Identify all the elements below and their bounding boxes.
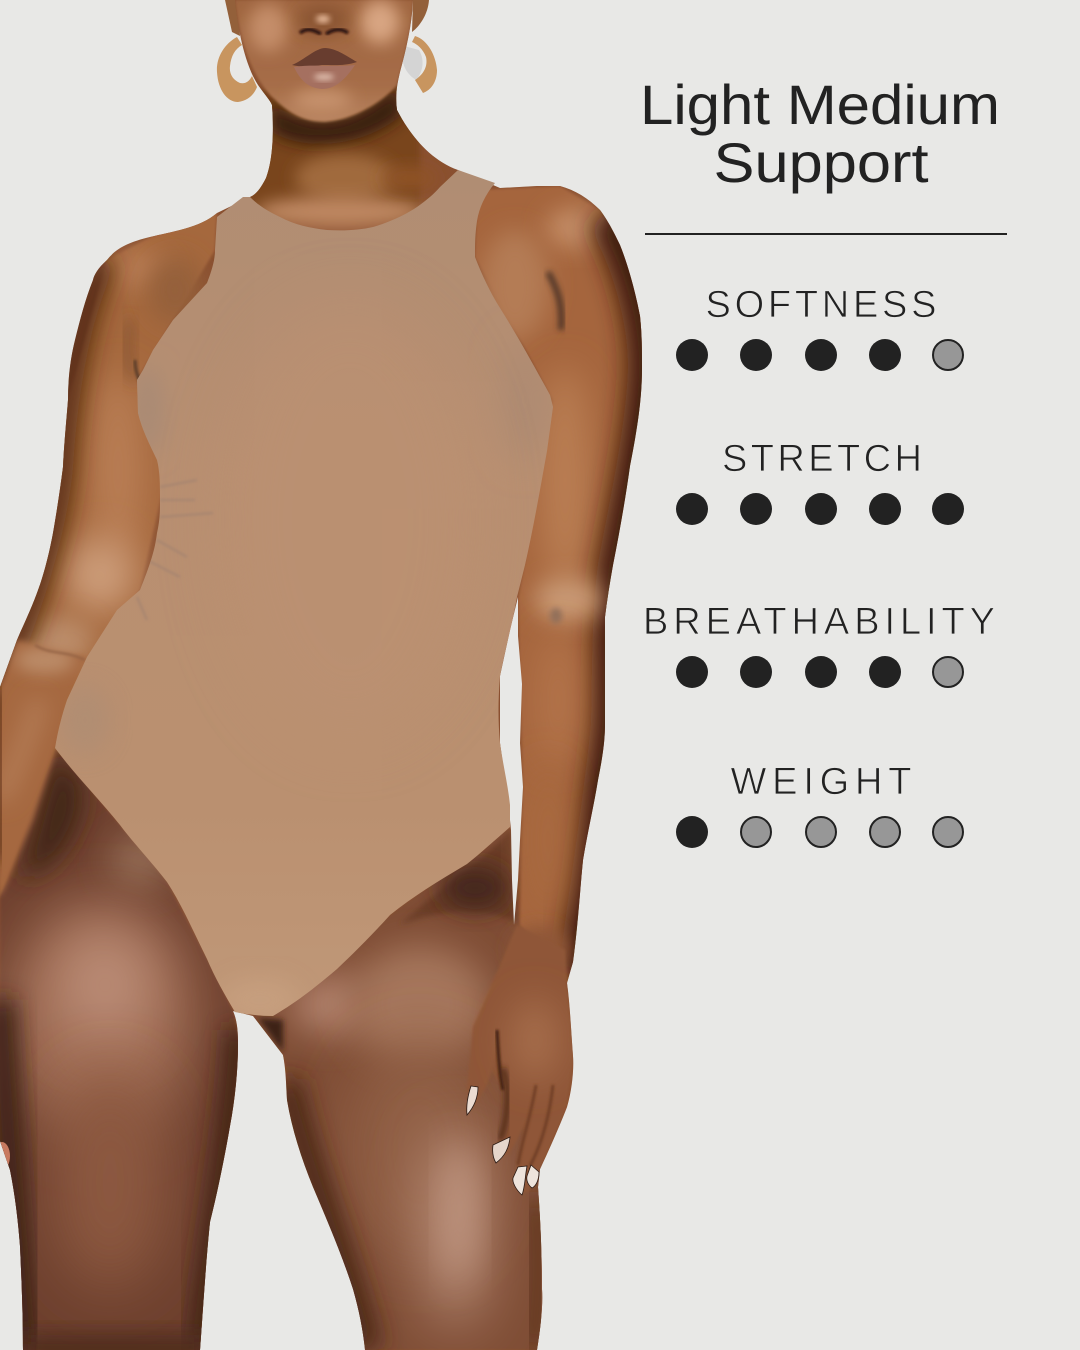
title: Support bbox=[714, 131, 929, 194]
fingernails bbox=[467, 1086, 539, 1195]
skin silhouette bbox=[0, 0, 700, 1350]
left leg bbox=[0, 748, 240, 1350]
rating: breathability bbox=[643, 601, 995, 688]
rating: breathability: BREATHABILITY bbox=[643, 601, 995, 643]
neck and chest bbox=[250, 90, 420, 220]
rating: weight: WEIGHT bbox=[730, 761, 912, 803]
icon: left earring bbox=[217, 0, 257, 102]
face details bbox=[292, 4, 357, 89]
icon: right earring bbox=[402, 0, 437, 93]
rating: stretch: STRETCH bbox=[722, 438, 922, 480]
rating: softness bbox=[676, 284, 963, 371]
left arm bbox=[0, 213, 217, 900]
model illustration bbox=[0, 0, 700, 1350]
divider bbox=[645, 233, 1007, 235]
bodysuit bbox=[55, 170, 553, 1022]
lips bbox=[292, 48, 357, 89]
thumb fragment bbox=[0, 1142, 10, 1165]
face bbox=[235, 0, 413, 122]
rating: softness: SOFTNESS bbox=[706, 284, 936, 326]
stretch dots bbox=[676, 493, 964, 525]
left forearm bbox=[0, 640, 87, 897]
rating: stretch bbox=[676, 438, 964, 525]
rating: weight bbox=[676, 761, 963, 848]
right leg bbox=[253, 827, 545, 1350]
side folds bbox=[137, 480, 213, 620]
right arm bbox=[475, 186, 642, 983]
title bbox=[640, 73, 1000, 194]
hand bbox=[467, 925, 573, 1192]
weight dots bbox=[676, 816, 963, 848]
nose bbox=[297, 4, 349, 36]
softness dots bbox=[676, 339, 963, 371]
background gap between arm and torso bbox=[500, 597, 523, 925]
breathability dots bbox=[676, 656, 963, 688]
title: Light Medium bbox=[640, 73, 1000, 136]
